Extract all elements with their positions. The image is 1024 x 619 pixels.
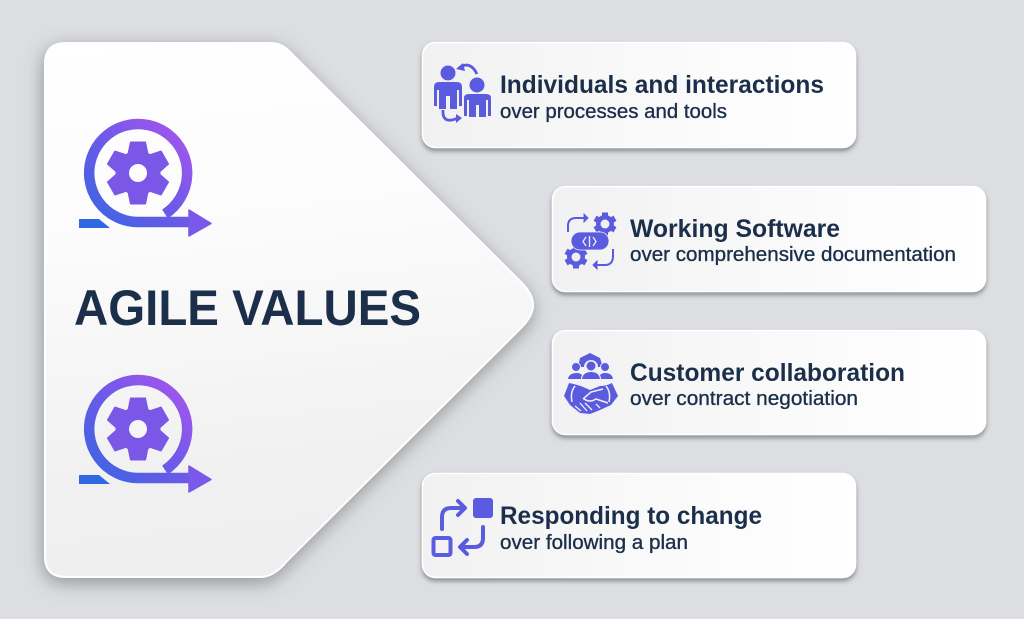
panel: customer collaboration xyxy=(552,330,986,434)
panel: responding to change xyxy=(422,474,856,578)
panel: agile values arrow xyxy=(45,43,533,577)
heading: Working Software xyxy=(630,215,840,243)
heading: Individuals and interactions xyxy=(500,71,824,99)
subtext: over following a plan xyxy=(500,532,688,554)
heading: Responding to change xyxy=(500,502,762,530)
heading: Customer collaboration xyxy=(630,359,905,387)
subtext: over comprehensive documentation xyxy=(630,244,956,266)
subtext: over contract negotiation xyxy=(630,388,858,410)
panel: individuals and interactions xyxy=(422,42,856,148)
subtext: over processes and tools xyxy=(500,101,727,123)
icon: agile loop gear bottom xyxy=(79,380,211,492)
icon: change squares and arrows xyxy=(434,498,493,555)
icon: team and handshake xyxy=(564,353,618,414)
panel: working software xyxy=(552,186,986,292)
icon: code and gears xyxy=(565,212,616,269)
title: AGILE VALUES xyxy=(74,280,421,336)
icon: people exchanging xyxy=(434,63,491,123)
icon: agile loop gear top xyxy=(79,124,211,236)
